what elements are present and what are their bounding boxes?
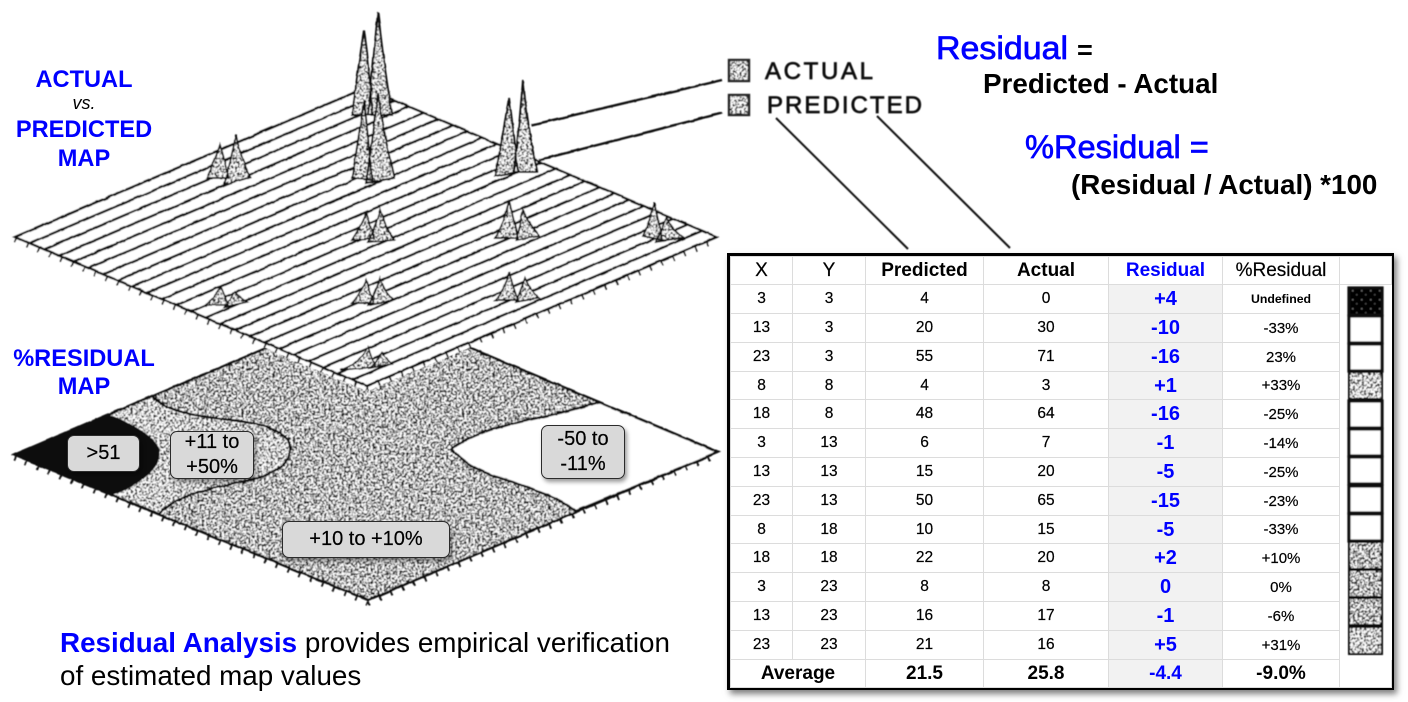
row 7: 13 (820, 463, 838, 480)
row 7: -25% (1263, 464, 1299, 480)
row 2: 3 (825, 319, 833, 336)
swatch: row 7 (1349, 457, 1382, 484)
row 5: 8 (825, 405, 833, 422)
average row: -9.0% (1256, 663, 1306, 684)
callout: -50 to -11%: -11% (560, 453, 606, 475)
row 13: 21 (916, 636, 933, 653)
row 8: -23% (1263, 492, 1299, 510)
row 5: -25% (1263, 406, 1299, 422)
row 13: +31% (1262, 636, 1300, 654)
peak: lower left pair (205, 287, 247, 307)
title: actual vs predicted map: MAP (58, 146, 110, 172)
title: actual vs predicted map (16, 67, 152, 172)
map region: +11 to +50% (14, 396, 290, 514)
swatch: row 13 (1349, 627, 1382, 654)
row 2: -33% (1263, 320, 1299, 336)
row 10 (753, 544, 1300, 572)
table header: Actual (1017, 260, 1075, 281)
callout: +11 to +50% (170, 431, 254, 479)
callout: +11 to +50%: +50% (186, 456, 238, 478)
row 8: -15 (1151, 490, 1180, 512)
callout: -50 to -11% (541, 425, 625, 479)
legend swatch: actual (729, 60, 749, 81)
surface map edges (15, 88, 717, 386)
row 6: 6 (920, 434, 929, 451)
row 6: -14% (1263, 434, 1299, 452)
surface contour lines (15, 88, 717, 386)
average row: Average (761, 663, 835, 684)
row 5: -16 (1151, 403, 1180, 425)
row 9: 15 (1037, 521, 1055, 538)
row 3: 55 (916, 348, 933, 365)
surface map base (15, 88, 717, 386)
data table (727, 253, 1394, 690)
peak: middle right pair (495, 200, 539, 240)
row 2 (753, 314, 1299, 342)
row 7 (753, 458, 1299, 486)
row 10: 20 (1037, 549, 1055, 566)
row 12: 16 (916, 607, 933, 624)
formula: residual: Predicted - Actual (983, 68, 1218, 99)
row 6: 3 (757, 434, 766, 451)
row 4: 8 (825, 377, 833, 394)
table header: Predicted (881, 260, 968, 281)
average row: 21.5 (906, 663, 943, 684)
row 6: -1 (1157, 432, 1174, 454)
row 8: 23 (753, 492, 770, 509)
row 6: 7 (1042, 434, 1050, 451)
row 6: 13 (820, 434, 838, 451)
callout: over 51 (67, 435, 140, 472)
row 11: 23 (820, 578, 838, 595)
row 10: +2 (1154, 547, 1177, 569)
row 8: 65 (1037, 492, 1055, 509)
row 5: 64 (1037, 405, 1055, 422)
surface map axis ticks (15, 240, 717, 389)
row 9: 10 (916, 521, 933, 538)
row 6 (757, 429, 1299, 457)
formula: percent residual: %Residual = (1025, 128, 1209, 165)
formula: residual: Residual (936, 30, 1068, 66)
formula: percent residual (1025, 128, 1377, 200)
title: actual vs predicted map: ACTUAL (36, 67, 132, 93)
leader lines from peaks to legend (532, 80, 722, 160)
row 9: -5 (1157, 518, 1174, 540)
map region: -50 to -11% (452, 402, 718, 511)
summary statement: Residual Analysis provides empirical verification (60, 627, 670, 658)
row 9 (757, 516, 1299, 543)
row 12: 17 (1037, 607, 1055, 624)
row 12: -6% (1268, 608, 1294, 624)
row 4: 3 (1042, 377, 1050, 394)
row 8: 13 (820, 492, 838, 509)
peak: bottom pair (340, 347, 392, 370)
title: residual map (13, 346, 155, 400)
table header: Residual (1126, 260, 1205, 281)
map-class swatch column (1349, 288, 1382, 654)
row 1: Undefined (1251, 292, 1311, 306)
row 11: 8 (1042, 578, 1050, 595)
row 4: +33% (1262, 377, 1300, 394)
peak: right pair (495, 80, 537, 176)
row 13 (753, 631, 1300, 659)
row 12 (753, 602, 1294, 630)
callout: over 51: >51 (87, 442, 120, 464)
row 3: -16 (1151, 346, 1180, 368)
row 11 (757, 573, 1292, 601)
row 9: 18 (820, 521, 838, 538)
row 9: -33% (1263, 521, 1299, 538)
row 4: 8 (757, 377, 766, 394)
row 12: -1 (1157, 605, 1174, 627)
row 7: -5 (1157, 461, 1174, 483)
average row: -4.4 (1149, 663, 1182, 684)
row 11: 3 (757, 578, 766, 595)
row 11: 0% (1270, 578, 1292, 596)
peak: lower right pair (495, 272, 539, 302)
row 1: 0 (1042, 290, 1050, 307)
swatch: row 8 (1349, 486, 1382, 513)
summary statement: of estimated map values (60, 660, 361, 691)
swatch: row 3 (1349, 344, 1382, 371)
row 2: -10 (1151, 317, 1180, 339)
legend label: actual: ACTUAL (765, 58, 873, 85)
row 2: 13 (753, 319, 770, 336)
table header: Y (823, 260, 835, 281)
legend swatch: predicted (729, 95, 749, 115)
row 4 (757, 372, 1300, 399)
title: residual map: %RESIDUAL (13, 346, 155, 372)
table header: X (755, 260, 768, 281)
table header: %Residual (1236, 260, 1326, 281)
legend label: predicted: PREDICTED (767, 92, 922, 119)
row 1: 3 (825, 290, 833, 307)
swatch: row 5 (1349, 401, 1382, 428)
swatch: row 9 (1349, 514, 1382, 541)
residual map (14, 305, 718, 603)
peak: tallest back pair (352, 12, 392, 115)
row 8: 50 (916, 492, 933, 509)
peak: lower pair (352, 278, 394, 305)
row 2: 20 (916, 319, 933, 336)
row 3: 23% (1266, 348, 1296, 366)
row 1: 4 (920, 290, 929, 307)
row 3: 23 (753, 348, 770, 365)
row 11: 8 (920, 578, 929, 595)
average row (761, 660, 1306, 687)
row 13: 16 (1037, 636, 1055, 653)
row 11: 0 (1160, 576, 1171, 598)
row 10: 18 (753, 549, 770, 566)
table header (755, 260, 1326, 281)
row 2: 30 (1037, 319, 1055, 336)
row 7: 13 (753, 463, 770, 480)
row 3 (753, 343, 1296, 371)
row 1 (757, 285, 1311, 313)
row 5: 18 (753, 405, 770, 422)
row 3: 3 (825, 348, 833, 365)
row 1: +4 (1154, 288, 1177, 310)
formula: residual (936, 30, 1218, 99)
peak: far right pair (643, 203, 684, 242)
swatch: row 4 (1349, 372, 1382, 399)
row 8 (753, 487, 1299, 515)
callout: -50 to -11%: -50 to (557, 428, 609, 450)
swatch: over 51 (1349, 288, 1382, 315)
row 12: 23 (820, 607, 838, 624)
row 7: 15 (916, 463, 933, 480)
row 13: 23 (753, 636, 770, 653)
map region: +10 to +10% (14, 305, 718, 600)
row 4: +1 (1154, 374, 1177, 396)
row 9: 8 (757, 521, 766, 538)
average row: 25.8 (1028, 663, 1064, 684)
formula: percent residual: (Residual / Actual) *100 (1071, 169, 1377, 200)
row 5: 48 (916, 405, 933, 422)
row 10: +10% (1262, 550, 1300, 566)
map region: over 51 (14, 415, 159, 494)
row 5 (753, 400, 1299, 428)
row 7: 20 (1037, 463, 1055, 480)
title: residual map: MAP (58, 374, 110, 400)
peak: left pair (207, 135, 251, 185)
callout: +10 to +10%: +10 to +10% (309, 528, 423, 550)
swatch: row 6 (1349, 429, 1382, 456)
summary statement (60, 627, 670, 691)
callout: +11 to +50%: +11 to (185, 431, 239, 453)
row 10: 18 (820, 549, 838, 566)
callout: +10 to +10% (282, 521, 450, 558)
row 13: +5 (1154, 634, 1177, 656)
legend (729, 58, 1010, 249)
peak: tallest front pair (352, 93, 394, 183)
swatch: row 2 (1349, 316, 1382, 343)
row 13: 23 (820, 636, 838, 653)
title: actual vs predicted map: PREDICTED (16, 117, 152, 143)
row 12: 13 (753, 607, 770, 624)
residual map axis ticks (14, 455, 718, 603)
peak: middle pair (352, 210, 394, 242)
vs. label: vs. (72, 93, 96, 113)
leader lines from legend to table (776, 116, 1010, 249)
actual vs predicted surface map (15, 12, 722, 389)
swatch: row 10 (1349, 542, 1382, 569)
formula: residual: = (1077, 35, 1093, 65)
swatch: row 11 (1349, 570, 1382, 597)
row 1: 3 (757, 290, 766, 307)
row 3: 71 (1037, 348, 1055, 365)
row 10: 22 (916, 549, 933, 566)
row 4: 4 (920, 377, 929, 394)
swatch: row 12 (1349, 598, 1382, 625)
